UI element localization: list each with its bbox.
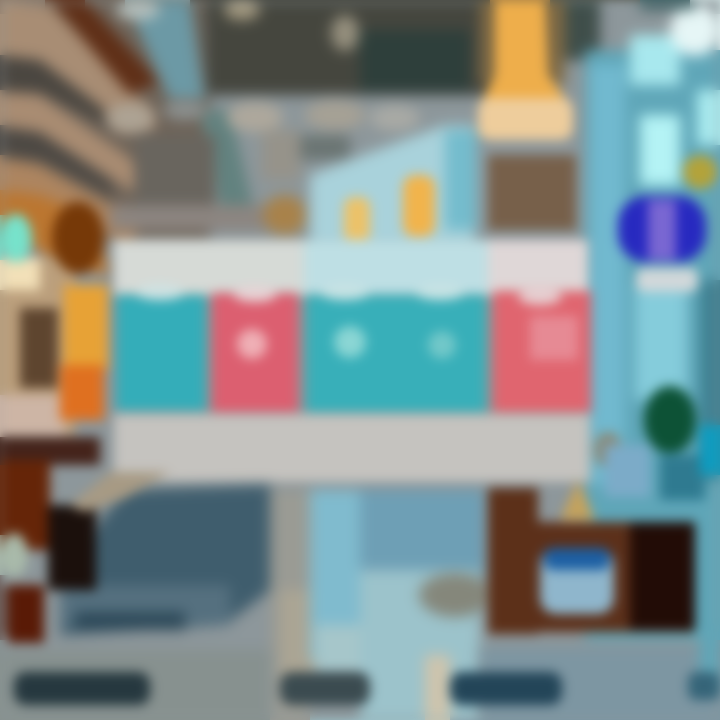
top-centre pale blue wall bbox=[310, 125, 477, 245]
lamp halo bbox=[480, 0, 565, 85]
small orange bottles bbox=[344, 175, 435, 243]
orange column bbox=[60, 285, 108, 420]
panel: teal column 1 bbox=[116, 295, 206, 411]
brown panel bbox=[488, 155, 576, 230]
dark brown left cabinet bbox=[0, 437, 100, 643]
brown desk bbox=[488, 488, 695, 634]
ceiling bbox=[205, 0, 600, 95]
blue shaft bbox=[116, 0, 255, 215]
panel: red column 1 bbox=[212, 293, 298, 413]
desk-side grey bbox=[419, 573, 491, 617]
right light-blue columns bbox=[585, 0, 720, 640]
icon: lamp bbox=[478, 0, 573, 140]
pale sign on cabinet bbox=[0, 533, 28, 577]
icon: blue badge bbox=[618, 196, 706, 262]
left shelf bbox=[0, 258, 75, 437]
left balconies bbox=[0, 0, 210, 275]
header scallops bbox=[136, 284, 562, 305]
infographic panel headers bbox=[114, 240, 588, 296]
icon: plant bbox=[644, 386, 696, 454]
icon: teal circle bbox=[0, 214, 32, 262]
panel footers bbox=[114, 414, 590, 482]
plant stand bbox=[594, 425, 720, 500]
brown arch bbox=[52, 202, 104, 274]
dark floor mats bbox=[14, 672, 720, 705]
panel: red column 2 bbox=[493, 291, 591, 413]
bottom floor bbox=[0, 630, 720, 720]
central grey mid-band bbox=[106, 100, 420, 235]
icon: yellow dot bbox=[683, 155, 717, 189]
desk screen bbox=[540, 548, 614, 614]
tan cone above desk bbox=[560, 480, 595, 520]
tan walkway bbox=[70, 472, 170, 512]
panel: teal column 2 bbox=[306, 295, 486, 413]
floor blue bbox=[60, 485, 485, 720]
white label under badge bbox=[636, 268, 698, 292]
